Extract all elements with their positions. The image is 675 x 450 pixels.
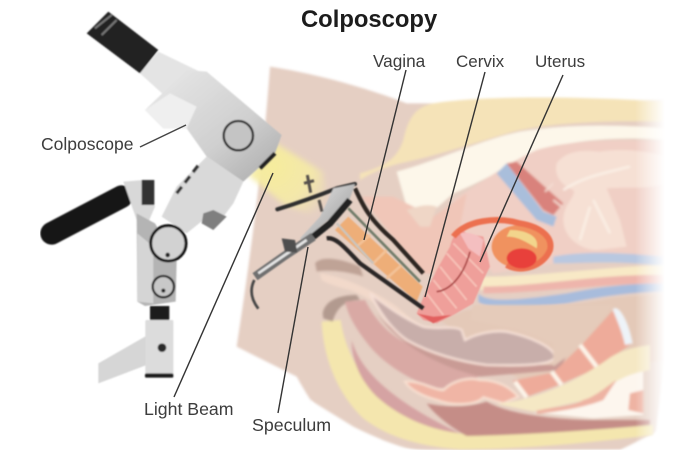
body silhouette	[237, 67, 667, 450]
thumb screws	[304, 175, 322, 212]
label: Light Beam	[144, 173, 273, 419]
light beam	[248, 143, 330, 222]
speculum	[252, 175, 423, 309]
label: Light Beam: Light Beam	[144, 399, 233, 419]
speculum blades	[355, 188, 423, 273]
sacral tail layers	[497, 345, 650, 412]
bowel loops	[556, 150, 667, 250]
main housing	[145, 70, 282, 182]
colon	[370, 293, 555, 365]
spine vertebrae	[513, 310, 632, 397]
label: Speculum	[252, 247, 331, 435]
label: Vagina: Vagina	[373, 51, 426, 71]
label: Uterus	[480, 52, 585, 262]
joint knob	[151, 226, 186, 261]
tissue wedge around vagina	[362, 193, 467, 273]
grey fold	[323, 295, 360, 322]
colposcope	[52, 12, 282, 383]
label: Speculum: Speculum	[252, 415, 331, 435]
anatomy cross-section	[237, 67, 667, 450]
label: Colposcope	[41, 125, 186, 154]
mauve band under colon	[377, 313, 573, 377]
focus knob	[224, 121, 253, 150]
eyepiece	[87, 12, 158, 73]
orange vaginal canal	[335, 217, 423, 302]
fallopian tube and ovary	[492, 225, 548, 268]
support column	[137, 213, 177, 306]
label: Uterus: Uterus	[535, 52, 585, 71]
fat crescent	[322, 320, 653, 449]
skin fold under fat crescent	[310, 400, 430, 450]
lower pale layers	[553, 253, 667, 267]
uterus and ovary	[335, 217, 551, 323]
lower knob	[153, 276, 174, 297]
dark lower rectum	[427, 402, 650, 436]
label: Cervix: Cervix	[456, 52, 505, 71]
lower abdominal tissue	[440, 293, 667, 380]
tissue behind spine	[470, 305, 613, 367]
label: Cervix	[425, 52, 505, 297]
white cut-out under body	[360, 290, 675, 450]
uterine cavity line	[437, 252, 470, 292]
red vessel	[507, 162, 563, 215]
column collar	[150, 306, 169, 322]
upper handle	[277, 184, 355, 209]
handle	[52, 197, 122, 233]
lower muscle band	[352, 340, 460, 433]
perineal folds	[315, 259, 363, 277]
upper fat layer	[360, 97, 667, 180]
abdominal cavity	[453, 140, 667, 273]
white fade on right edge	[635, 90, 675, 450]
arm	[162, 157, 243, 233]
eyepiece tube	[140, 52, 203, 107]
blue vessel	[497, 163, 557, 227]
lower mount	[98, 330, 173, 383]
lower handle and hook	[255, 237, 313, 277]
intestinal bulges	[405, 379, 518, 404]
lower pelvic structures	[310, 290, 675, 450]
blue vein band	[478, 283, 667, 307]
title: Colposcopy	[301, 6, 438, 33]
bladder region	[397, 126, 667, 217]
label: Vagina	[364, 51, 426, 240]
label: Colposcope: Colposcope	[41, 134, 133, 154]
upper muscle band	[345, 300, 480, 388]
cervix lip	[417, 313, 452, 323]
uterus body	[417, 231, 490, 323]
